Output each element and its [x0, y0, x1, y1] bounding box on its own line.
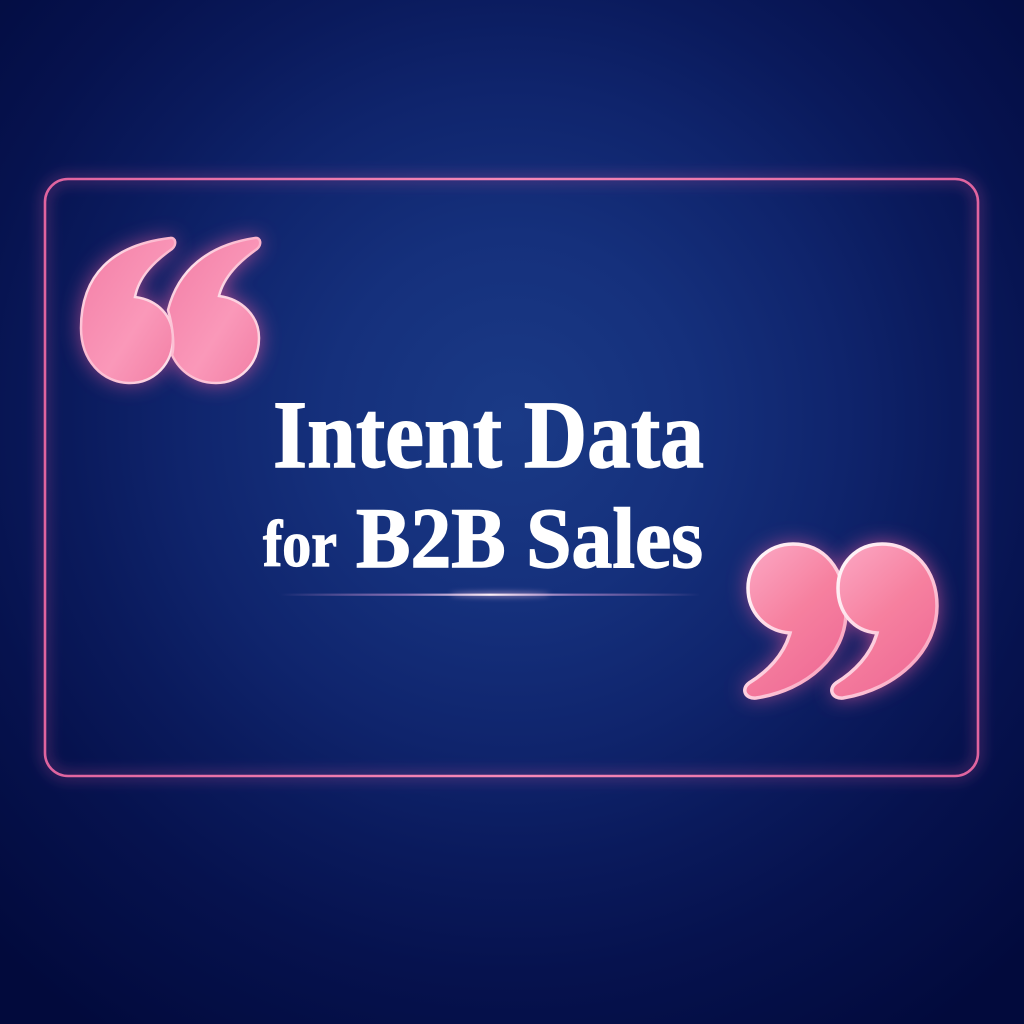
title: first line: Intent Data [273, 381, 704, 488]
panel: glowing rounded frame [45, 179, 978, 776]
icon: closing quotation mark [745, 544, 937, 698]
icon: opening quotation mark [81, 238, 260, 383]
title: second line: B2B Sales [356, 490, 703, 586]
title: second line small word: for [263, 508, 337, 581]
divider under title [280, 592, 700, 597]
